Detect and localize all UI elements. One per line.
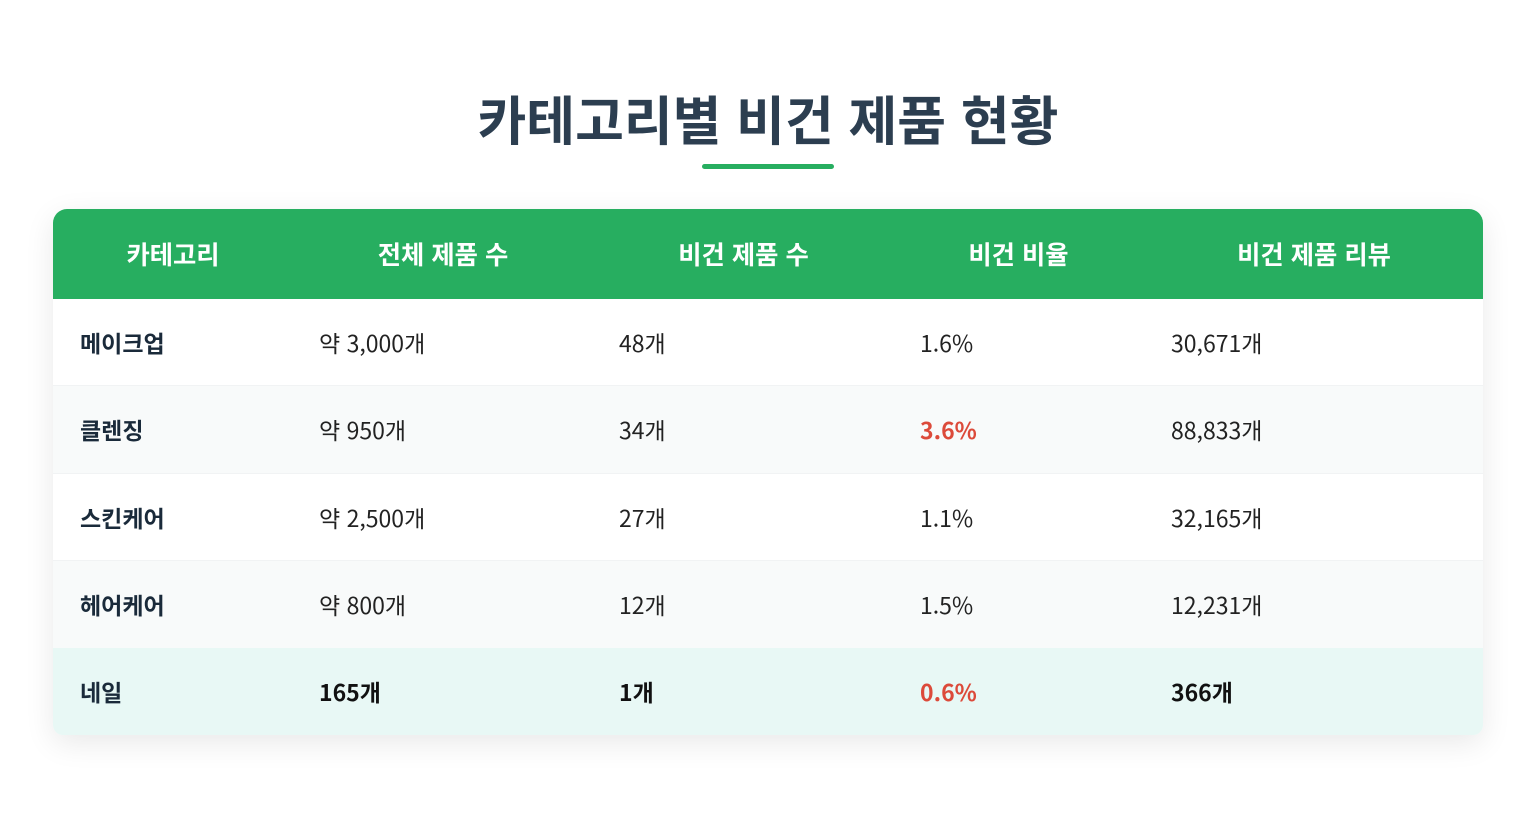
table header row (53, 209, 1483, 299)
title underline (702, 164, 834, 169)
row: 스킨케어: 32,165개 (1171, 500, 1262, 534)
row: 메이크업 (53, 299, 1483, 386)
row: 클렌징: 3.6% (920, 412, 977, 446)
row: 네일 (highlighted): 366개 (1171, 674, 1233, 708)
panel: data table (53, 209, 1483, 735)
row: 스킨케어: 1.1% (920, 500, 973, 534)
table header row: 전체 제품 수 (378, 236, 508, 272)
row: 클렌징 (53, 386, 1483, 474)
table header row: 비건 제품 수 (678, 236, 809, 272)
row: 메이크업: 메이크업 (80, 325, 165, 359)
row: 헤어케어: 헤어케어 (80, 586, 165, 620)
row: 헤어케어: 1.5% (920, 586, 973, 620)
row: 네일 (highlighted): 0.6% (920, 674, 977, 708)
row: 클렌징: 약 950개 (319, 412, 406, 446)
row: 헤어케어: 12,231개 (1171, 586, 1262, 620)
row: 헤어케어: 12개 (619, 586, 666, 620)
row: 메이크업: 1.6% (920, 325, 973, 359)
table header row: 카테고리 (126, 236, 220, 272)
row: 클렌징: 클렌징 (80, 412, 143, 446)
row: 스킨케어: 27개 (619, 500, 666, 534)
row: 스킨케어: 약 2,500개 (319, 500, 425, 534)
row: 네일 (highlighted): 165개 (319, 674, 381, 708)
row: 네일 (highlighted) (53, 648, 1483, 735)
row: 메이크업: 48개 (619, 325, 666, 359)
row: 메이크업: 30,671개 (1171, 325, 1262, 359)
title: 카테고리별 비건 제품 현황 (478, 80, 1058, 156)
row: 클렌징: 88,833개 (1171, 412, 1262, 446)
row: 클렌징: 34개 (619, 412, 666, 446)
table header row: 비건 비율 (968, 236, 1069, 272)
row: 헤어케어: 약 800개 (319, 586, 406, 620)
table header row: 비건 제품 리뷰 (1237, 236, 1391, 272)
row: 네일 (highlighted): 네일 (80, 674, 122, 708)
row: 네일 (highlighted): 1개 (619, 674, 654, 708)
row: 스킨케어 (53, 474, 1483, 561)
row: 메이크업: 약 3,000개 (319, 325, 425, 359)
row: 스킨케어: 스킨케어 (80, 500, 165, 534)
row: 헤어케어 (53, 561, 1483, 648)
